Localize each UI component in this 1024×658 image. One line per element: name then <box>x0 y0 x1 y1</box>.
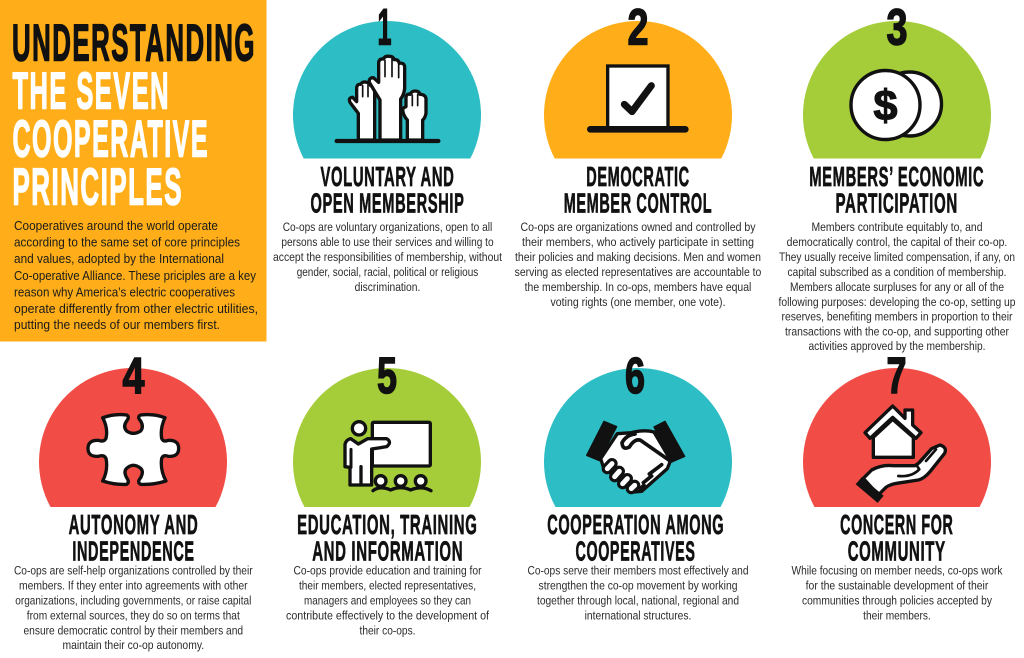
description: Co-ops serve their members most effectively and <box>528 563 749 577</box>
heading <box>840 509 953 566</box>
green semicircle <box>803 21 991 159</box>
panel: introduction: UNDERSTANDING <box>12 14 256 72</box>
icon: coins: $ <box>874 82 898 130</box>
heading: INDEPENDENCE <box>72 536 195 566</box>
orange semicircle <box>544 21 732 159</box>
description: serving as elected representatives are accountable to <box>515 265 761 279</box>
description: their policies and making decisions. Men and women <box>515 250 761 264</box>
number 2: 2 <box>628 0 648 56</box>
description: managers and employees so they can <box>304 593 471 607</box>
intro text: reason why America’s electric cooperatives <box>14 284 235 300</box>
description: communities through policies accepted by <box>802 593 993 607</box>
description: gender, social, racial, political or religious <box>297 265 478 279</box>
description: from external sources, they do so on terms that <box>27 608 240 622</box>
panel: principle 6 <box>528 347 749 622</box>
description: Co-ops are self-help organizations controlled by their <box>14 563 253 577</box>
intro text: Co-operative Alliance. These priciples are a key <box>14 268 256 283</box>
panel: principle 1: 1 <box>378 0 392 56</box>
description: persons able to use their services and willing to <box>281 235 494 249</box>
description <box>286 563 490 637</box>
heading: MEMBER CONTROL <box>564 188 712 218</box>
description: for the sustainable development of their <box>806 578 988 592</box>
description: accept the responsibilities of membership, without <box>273 250 502 264</box>
description: international structures. <box>585 608 691 622</box>
description: the membership. In co-ops, members have equal <box>525 280 751 294</box>
description: ensure democratic control by their members and <box>23 623 243 637</box>
panel: principle 7 <box>792 347 1003 622</box>
intro text <box>14 218 258 332</box>
intro text: according to the same set of core principles <box>14 234 240 250</box>
heading: COOPERATIVES <box>576 536 696 566</box>
title <box>12 14 256 216</box>
description: together through local, national, regional and <box>537 593 739 607</box>
red semicircle <box>39 368 227 507</box>
description <box>273 220 502 294</box>
intro text: Cooperatives around the world operate <box>14 218 218 233</box>
description: Co-ops are organizations owned and controlled by <box>520 220 756 234</box>
icon: coins <box>851 70 942 140</box>
panel: principle 4 <box>14 347 253 652</box>
intro text: putting the needs of our members first. <box>14 317 220 332</box>
panel: introduction <box>0 0 266 342</box>
description: their co-ops. <box>360 623 416 637</box>
intro text: and values, adopted by the International <box>14 251 224 266</box>
heading: DEMOCRATIC <box>586 161 690 192</box>
icon: ballot box <box>590 66 685 129</box>
heading: EDUCATION, TRAINING <box>297 509 477 540</box>
description: discrimination. <box>355 280 420 294</box>
panel: principle 3 <box>778 0 1016 353</box>
description: voting rights (one member, one vote). <box>550 295 726 309</box>
description <box>14 563 253 652</box>
description: maintain their co-op autonomy. <box>62 638 204 652</box>
number 5: 5 <box>377 347 397 404</box>
title: THE SEVEN <box>12 62 170 120</box>
description: contribute effectively to the development of <box>286 608 490 622</box>
description: organizations, including governments, or raise capital <box>15 593 251 607</box>
icon: puzzle piece <box>88 415 179 484</box>
heading: COOPERATION AMONG <box>547 509 724 540</box>
number 4: 4 <box>122 347 145 404</box>
heading <box>564 161 712 218</box>
icon: teacher and students <box>345 422 431 491</box>
heading <box>297 509 477 566</box>
description: Co-ops provide education and training for <box>294 563 482 577</box>
description <box>778 220 1016 353</box>
teal semicircle <box>544 368 732 507</box>
red semicircle <box>803 368 991 507</box>
heading <box>547 509 724 566</box>
heading: AND INFORMATION <box>312 536 463 566</box>
intro text: operate differently from other electric utilities, <box>14 301 258 316</box>
description <box>515 220 761 309</box>
green semicircle <box>293 368 481 507</box>
heading: VOLUNTARY AND <box>320 161 454 192</box>
description <box>792 563 1003 622</box>
title: COOPERATIVE <box>12 110 209 168</box>
icon: raised hands <box>337 56 438 141</box>
description: their members, elected representatives, <box>299 578 476 592</box>
description: Members contribute equitably to, and <box>812 220 983 234</box>
description: members. If they enter into agreements with other <box>19 578 248 592</box>
teal semicircle <box>293 21 481 159</box>
panel: principle 2 <box>515 0 761 309</box>
number 7: 7 <box>886 347 906 404</box>
description: activities approved by the membership. <box>808 339 986 353</box>
heading <box>69 509 198 566</box>
description: strengthen the co-op movement by working <box>538 578 738 592</box>
description <box>528 563 749 622</box>
number 6: 6 <box>625 347 645 404</box>
heading <box>809 161 984 218</box>
heading: AUTONOMY AND <box>69 509 198 540</box>
number 3: 3 <box>886 0 908 56</box>
icon: handshake <box>587 421 685 492</box>
icon: hand holding house <box>859 406 945 499</box>
title: PRINCIPLES <box>12 158 183 216</box>
panel: principle 1 <box>273 0 502 294</box>
description: Co-ops are voluntary organizations, open to all <box>283 220 492 234</box>
description: their members. <box>863 608 931 622</box>
panel: principle 5 <box>286 347 490 637</box>
heading <box>310 161 464 218</box>
heading: OPEN MEMBERSHIP <box>310 188 464 218</box>
description: their members, who actively participate in setting <box>522 235 754 249</box>
